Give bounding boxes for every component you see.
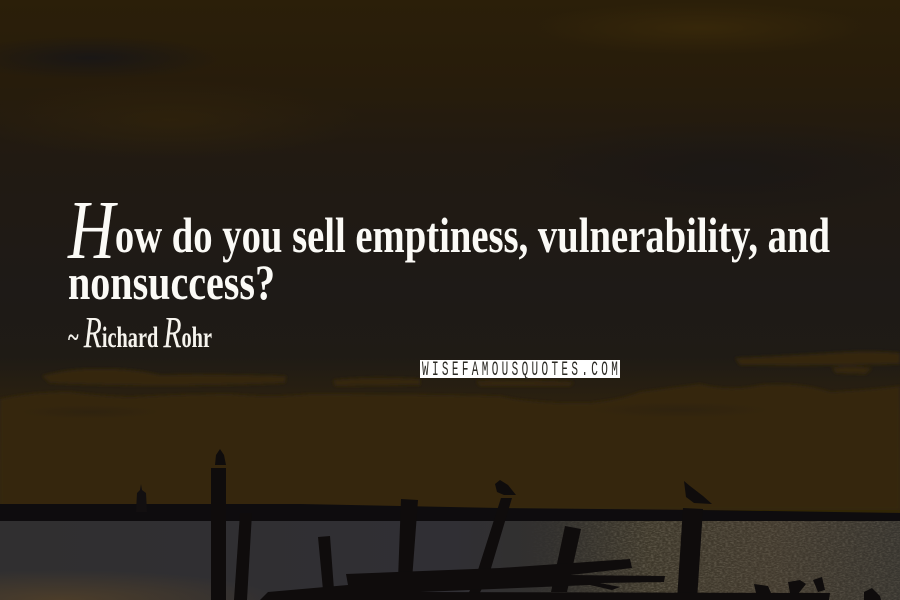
pier silhouette [211,449,881,600]
post with perched bird [211,449,226,600]
post: crossed pile [551,526,581,592]
attribution: author: ~ Richard Rohr [68,308,212,357]
horizon: dark shoreline [0,504,900,521]
pier crossbeams [260,559,830,600]
post: slanted pile with bird [466,480,516,600]
post: short pile [318,536,334,590]
icon: small birds on beam [754,577,881,600]
post: tall pile [398,499,418,580]
watermark: wisefamousquotes.com: WISEFAMOUSQUOTES.COM [422,359,618,381]
background: water [0,518,900,600]
icon: distant lighthouse [136,484,147,512]
post with gull [677,481,712,600]
heading: quote text [67,184,830,310]
quote line 1: H [67,184,118,277]
quote line 2: nonsuccess? [68,254,275,310]
post: leaning pile [234,513,252,600]
